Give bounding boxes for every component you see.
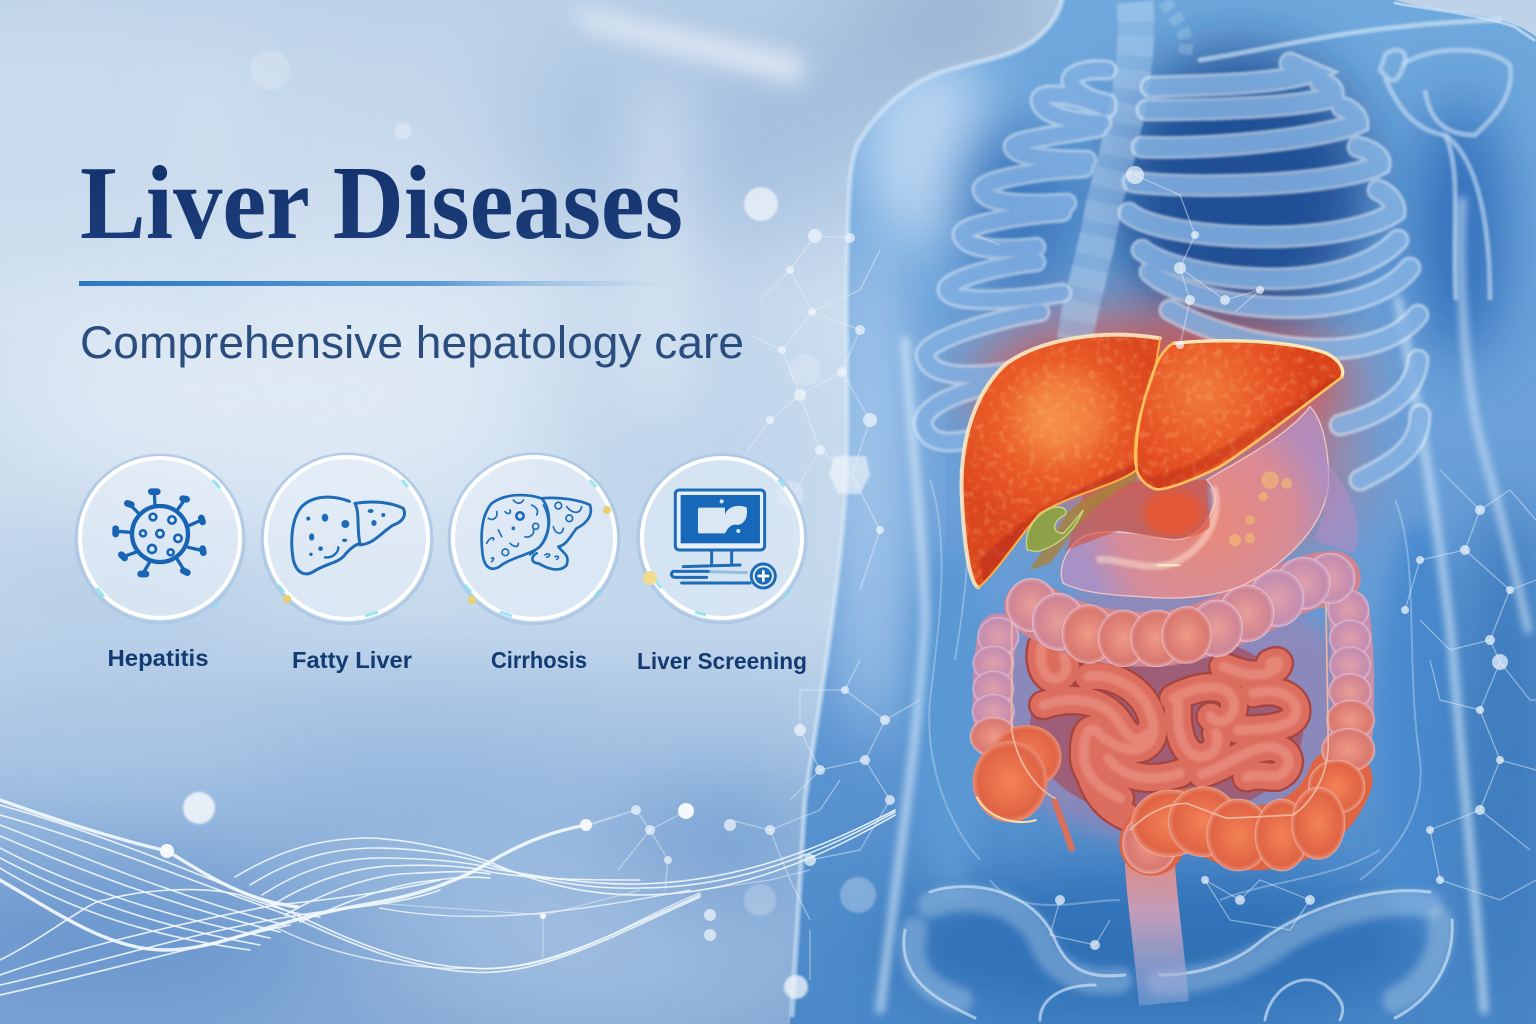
network nodes: [631, 166, 1514, 950]
bokeh lights: [160, 50, 876, 999]
glass disc: [638, 455, 806, 623]
rectum: [1150, 843, 1164, 1003]
icon: fatty liver: [292, 497, 405, 574]
card: Liver Screening: [637, 455, 807, 674]
plus badge: [751, 564, 775, 588]
glass disc: [76, 455, 244, 623]
icon: virus: [116, 492, 203, 574]
icon: cirrhosis liver: [482, 495, 591, 569]
body contour glow: [792, 0, 1534, 1015]
spine and sternum: [1075, 2, 1186, 340]
sigmoid colon: [1123, 787, 1345, 873]
transverse colon: [1007, 553, 1355, 667]
wave bundle D: [275, 890, 700, 969]
title: Liver Diseases: [80, 144, 683, 261]
appendix and vessels: [1012, 603, 1328, 848]
human torso silhouette: [780, 0, 1536, 1024]
liver right lobe: [962, 335, 1160, 587]
label: Liver Screening: Liver Screening: [637, 648, 807, 674]
ascending colon: [970, 617, 1019, 756]
card: Hepatitis: [76, 455, 244, 671]
card: Fatty Liver: [262, 454, 432, 673]
glass disc: [262, 454, 432, 624]
subtitle: Comprehensive hepatology care: [80, 317, 744, 368]
gallbladder: [1026, 507, 1083, 552]
label: Hepatitis: Hepatitis: [108, 645, 208, 671]
wave bundle A: [0, 805, 700, 973]
flowing wave lines: [0, 800, 895, 995]
liver: [953, 327, 1353, 593]
gallbladder duct: [1030, 470, 1137, 570]
liver texture: [964, 336, 1340, 582]
glass disc: [449, 454, 619, 624]
digestive organs: [970, 553, 1375, 1003]
shoulder bone: [1380, 50, 1511, 300]
label: Fatty Liver: Fatty Liver: [292, 647, 412, 673]
cecum: [973, 725, 1062, 822]
label: Cirrhosis: Cirrhosis: [491, 647, 587, 673]
stomach: [1061, 407, 1358, 598]
shadow behind intestines: [987, 577, 1360, 843]
pelvis bones: [904, 887, 1452, 1020]
divider rule: [79, 281, 679, 286]
icon: screening monitor: [671, 490, 775, 588]
abdominal wisps: [929, 470, 1421, 905]
small intestine: [1030, 633, 1303, 820]
wave bundle B: [0, 810, 895, 995]
molecular network left and centre: [373, 175, 1536, 980]
colon base tubes: [993, 578, 1353, 843]
descending colon: [1308, 590, 1375, 813]
card: Cirrhosis: [449, 454, 619, 673]
liver left lobe: [1136, 341, 1343, 489]
red glow around liver: [975, 317, 1360, 560]
rib cage: [923, 63, 1420, 480]
liver highlights: [962, 335, 1343, 587]
wave bundle C: [0, 800, 586, 950]
